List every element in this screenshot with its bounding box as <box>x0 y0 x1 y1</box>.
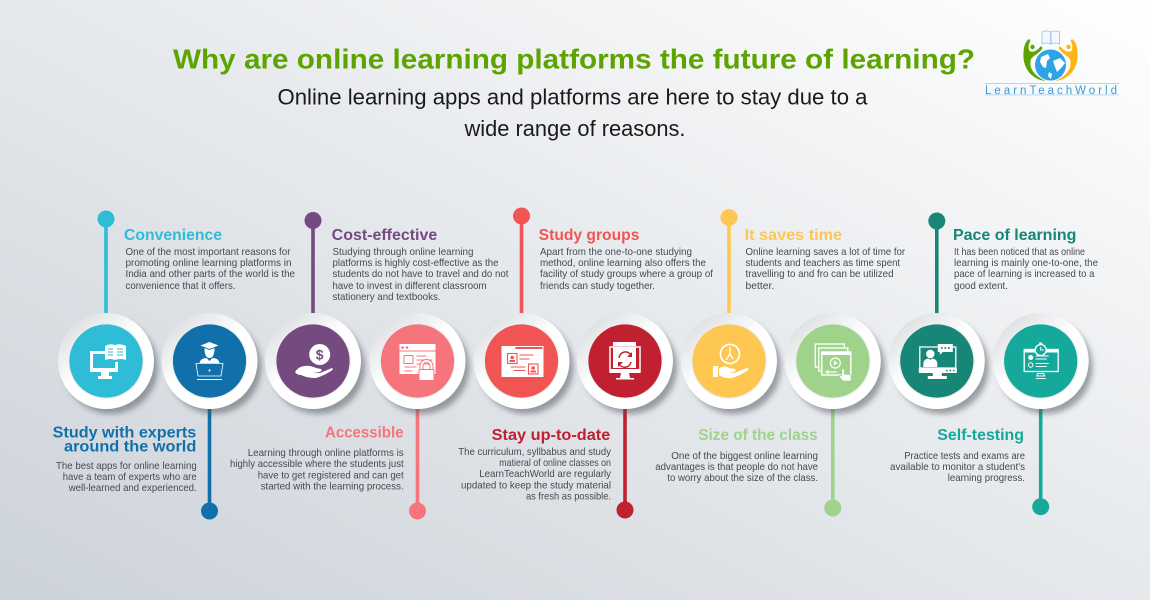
text: it saves time: better. <box>746 281 774 292</box>
panel: study groups <box>513 208 713 316</box>
heading: pace of learning: Pace of learning <box>953 227 1076 244</box>
heading: size of the class: Size of the class <box>698 427 818 444</box>
text: convenience: convenience that it offers. <box>126 281 236 292</box>
text: accessible: have to get registered and can get <box>258 470 404 481</box>
heading: study groups: Study groups <box>539 227 639 244</box>
heading: study with experts: Study with experts <box>53 425 196 442</box>
panel: it saves time <box>720 209 906 316</box>
text: study groups: facility of study groups where a group of <box>540 269 713 280</box>
heading: stay up-to-date: Stay up-to-date <box>492 427 611 444</box>
heading: study with experts <box>53 425 196 456</box>
text: stay up-to-date <box>458 447 612 503</box>
text: study groups <box>540 247 713 292</box>
text: accessible: started with the learning process. <box>261 482 404 492</box>
logo: LearnTeachWorld <box>985 31 1119 97</box>
text: self-testing <box>890 451 1025 484</box>
panel: study with experts <box>53 405 218 520</box>
text: it saves time: Online learning saves a lot of time for <box>746 247 906 258</box>
heading: it saves time: It saves time <box>745 227 842 244</box>
text: cost-effective: platforms is highly cost-effective as the <box>332 258 499 269</box>
text: stay up-to-date: The curriculum, syllbabus and study <box>458 447 612 458</box>
icon: browser with padlock on pink disc <box>370 313 470 414</box>
text: convenience: India and other parts of the world is the <box>126 269 295 280</box>
text: stay up-to-date: LearnTeachWorld are regularly <box>479 469 612 480</box>
icon: web page with profiles on red disc <box>474 313 574 414</box>
panel: cost-effective <box>304 212 509 316</box>
text: pace of learning: It has been noticed that as online <box>954 247 1085 258</box>
icon: graduate with laptop on blue disc <box>162 313 262 414</box>
panel: self-testing <box>890 405 1049 515</box>
text: size of the class: to worry about the size of the class. <box>667 473 818 484</box>
subtitle: wide range of reasons. <box>464 116 686 141</box>
text: stay up-to-date: as fresh as possible. <box>526 492 611 503</box>
heading: cost-effective: Cost-effective <box>332 227 438 244</box>
panel: stay up-to-date <box>458 405 634 518</box>
text: study with experts <box>56 461 197 494</box>
text: study groups: Apart from the one-to-one studying <box>540 247 692 258</box>
subtitle <box>278 84 868 141</box>
icon: online tutor on monitor on dark teal disc <box>889 313 989 414</box>
icon: hand holding coin on purple disc: $ <box>316 346 324 362</box>
text: cost-effective: students do not have to travel and do not <box>332 269 509 280</box>
text: it saves time <box>746 247 906 292</box>
text: accessible: highly accessible where the students just <box>230 459 404 470</box>
panel: convenience <box>98 210 295 316</box>
icon: computer and book on cyan disc <box>58 313 158 414</box>
text: self-testing: Practice tests and exams are <box>904 451 1025 462</box>
text: cost-effective: stationery and textbooks. <box>332 292 440 303</box>
text: pace of learning: learning is mainly one-to-one, the <box>954 258 1098 269</box>
text: convenience: promoting online learning platforms in <box>126 258 292 269</box>
text: accessible: Learning through online platforms is <box>248 448 404 459</box>
text: study with experts: well-learned and experienced. <box>68 483 197 494</box>
text: self-testing: learning progress. <box>948 473 1025 484</box>
title: Why are online learning platforms the future of learning? <box>173 44 975 74</box>
heading: convenience: Convenience <box>124 227 222 244</box>
subtitle: Online learning apps and platforms are here to stay due to a <box>278 84 868 110</box>
text: cost-effective: Studying through online learning <box>332 247 474 258</box>
text: size of the class: advantages is that people do not have <box>655 462 818 473</box>
text: convenience: One of the most important reasons for <box>126 247 291 258</box>
text: study with experts: have a team of experts who are <box>63 472 197 483</box>
icon: hand holding coin on purple disc <box>265 313 365 414</box>
logo: LearnTeachWorld: LearnTeachWorld <box>985 85 1117 97</box>
panel: size of the class <box>655 405 841 516</box>
text: study with experts: The best apps for online learning <box>56 461 197 472</box>
text: size of the class: One of the biggest online learning <box>671 451 818 462</box>
text: stay up-to-date: matieral of online classes on <box>499 458 611 469</box>
icon: video windows with hand on green disc <box>785 313 885 414</box>
panel: pace of learning <box>928 212 1098 316</box>
text: pace of learning: pace of learning is increased to a <box>954 269 1095 280</box>
icon: test on monitor with stopwatch on teal disc <box>993 313 1093 414</box>
panel: accessible <box>230 405 426 520</box>
text: study groups: friends can study together. <box>540 281 655 292</box>
text: it saves time: students and teachers as time spent <box>746 258 900 269</box>
text: pace of learning <box>954 247 1098 292</box>
text: study groups: method, online learning also offers the <box>540 258 706 269</box>
text: convenience <box>126 247 295 292</box>
heading: study with experts: around the world <box>64 439 196 456</box>
text: self-testing: available to monitor a student's <box>890 462 1025 473</box>
text: it saves time: travelling to and fro can be utilized <box>746 269 894 280</box>
text: stay up-to-date: updated to keep the study material <box>461 480 611 492</box>
text: accessible <box>230 448 404 492</box>
heading: accessible: Accessible <box>325 425 404 442</box>
text: cost-effective <box>332 247 509 303</box>
text: cost-effective: have to invest in different classroom <box>332 281 486 292</box>
icon: clock over hand on yellow disc <box>681 313 781 414</box>
text: size of the class <box>655 451 818 484</box>
text: pace of learning: good extent. <box>954 281 1008 292</box>
heading: self-testing: Self-testing <box>937 427 1024 444</box>
icon: monitor with refresh on dark red disc <box>577 313 677 414</box>
